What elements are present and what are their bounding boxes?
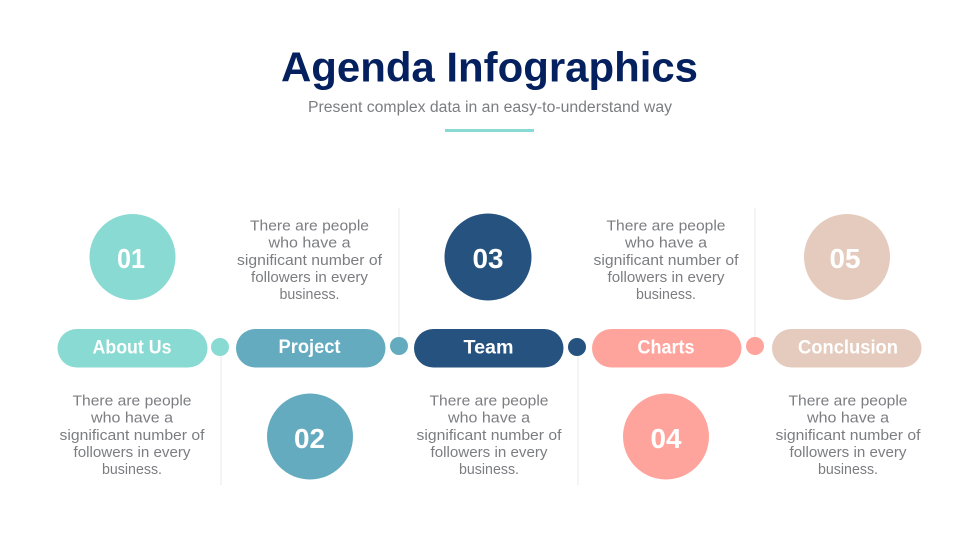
description 3: business.	[459, 461, 519, 478]
number badge 03: 03	[472, 243, 504, 274]
description 3: who have a	[447, 410, 531, 427]
pill: Project	[236, 329, 386, 368]
connector dot 3	[568, 338, 586, 356]
number badge 05: 05	[830, 243, 860, 274]
description 1: business.	[102, 461, 162, 478]
description 1: who have a	[90, 410, 174, 427]
description 2	[237, 218, 383, 303]
title underline	[445, 129, 534, 132]
step 02: Project	[236, 218, 408, 480]
description 2: significant number of	[237, 252, 383, 269]
description 4: who have a	[624, 235, 708, 252]
description 5: significant number of	[776, 427, 921, 444]
description 5: business.	[818, 461, 878, 478]
description 5: followers in every	[790, 444, 907, 461]
number badge 05	[804, 214, 890, 300]
description 4: significant number of	[594, 252, 739, 269]
description 4: followers in every	[608, 269, 725, 286]
description 5: There are people	[788, 392, 908, 410]
title: Agenda Infographics	[281, 44, 698, 90]
number badge 01	[90, 214, 176, 300]
pill: Charts: Charts	[638, 338, 694, 358]
connector dot 1	[211, 338, 229, 356]
description 2: who have a	[267, 235, 351, 252]
description 2: followers in every	[251, 269, 368, 286]
pill: About Us	[58, 329, 208, 368]
number badge 04	[623, 394, 709, 480]
pill: Team: Team	[464, 338, 514, 358]
description 4: There are people	[606, 218, 726, 234]
number badge 01: 01	[117, 243, 145, 274]
description 3: followers in every	[430, 444, 548, 461]
description 2: There are people	[250, 218, 369, 234]
description 4	[594, 218, 739, 303]
subtitle: Present complex data in an easy-to-understand way	[308, 99, 672, 116]
description 1	[60, 392, 205, 478]
number badge 03	[444, 214, 532, 300]
pill: Conclusion: Conclusion	[798, 338, 898, 358]
description 1: significant number of	[60, 427, 205, 444]
step 03: Team	[414, 214, 586, 478]
pill: Conclusion	[772, 329, 922, 368]
description 5: who have a	[806, 410, 890, 427]
step 05: Conclusion	[772, 214, 922, 478]
description 4: business.	[636, 286, 696, 303]
description 3: There are people	[430, 392, 548, 410]
step 01: About Us	[58, 214, 229, 478]
pill: Project: Project	[278, 337, 341, 358]
pill: Team	[414, 329, 564, 368]
description 1: There are people	[72, 392, 192, 410]
connector dot 2	[390, 337, 408, 355]
pill: Charts	[592, 329, 742, 368]
step 04: Charts	[592, 218, 764, 480]
pill: About Us: About Us	[92, 338, 172, 358]
number badge 02: 02	[294, 423, 325, 454]
description 3	[416, 392, 562, 478]
number badge 04: 04	[650, 423, 682, 454]
description 3: significant number of	[416, 427, 562, 444]
description 2: business.	[280, 286, 340, 303]
number badge 02	[267, 394, 353, 480]
description 1: followers in every	[74, 444, 191, 461]
connector dot 4	[746, 337, 764, 355]
description 5	[776, 392, 921, 478]
